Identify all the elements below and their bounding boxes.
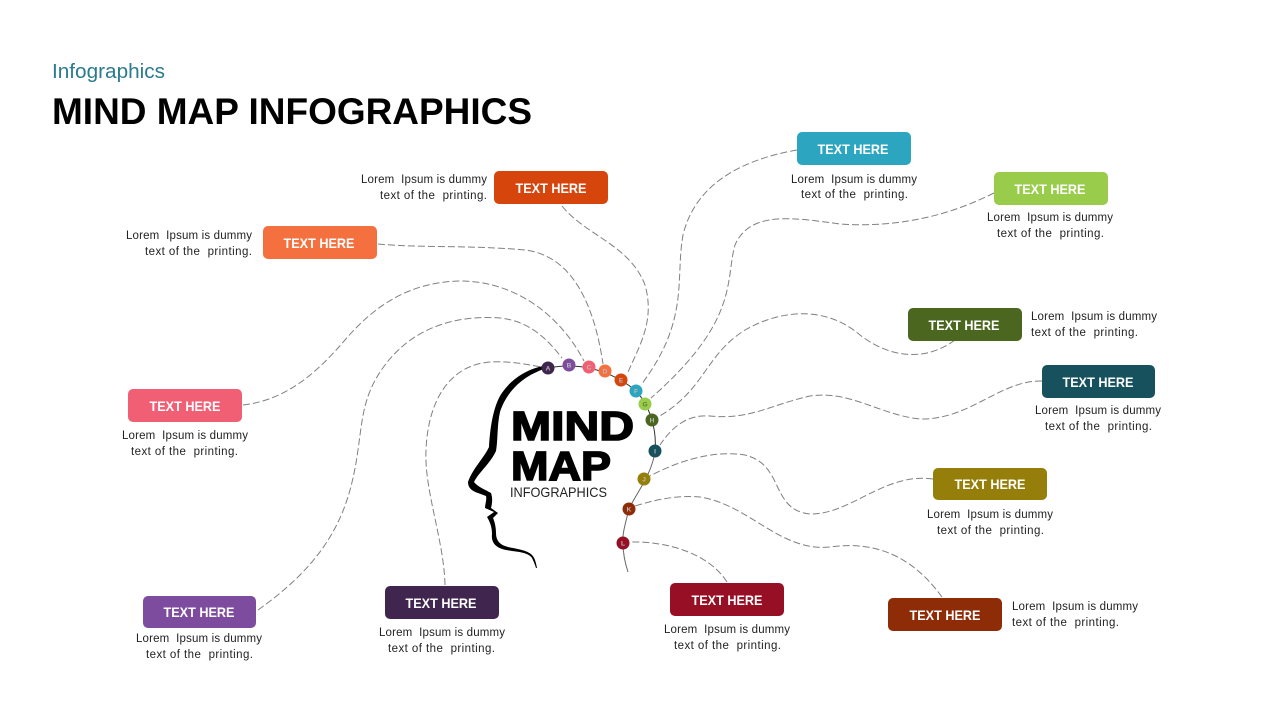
node spine bbox=[548, 366, 655, 572]
connector lines bbox=[243, 150, 1042, 610]
node D: orange box: TEXT HERE bbox=[284, 235, 354, 251]
node B: purple box: Lorem Ipsum is dummy bbox=[136, 633, 262, 645]
node badges: I bbox=[654, 448, 656, 456]
node B: purple box: text of the printing. bbox=[146, 649, 253, 661]
node F: teal box: TEXT HERE bbox=[818, 141, 888, 157]
node badges bbox=[542, 358, 662, 550]
node I: deep teal box: Lorem Ipsum is dummy bbox=[1035, 405, 1161, 417]
node H: dark green box: Lorem Ipsum is dummy bbox=[1031, 311, 1157, 323]
node E: red-orange box: Lorem Ipsum is dummy bbox=[361, 174, 487, 186]
node A: dark purple box: text of the printing. bbox=[388, 643, 495, 655]
node I: deep teal box bbox=[1035, 365, 1161, 433]
node A: dark purple box: Lorem Ipsum is dummy bbox=[379, 627, 505, 639]
node E: red-orange box bbox=[361, 171, 608, 204]
node E: red-orange box: TEXT HERE bbox=[516, 180, 586, 196]
node K: brown box bbox=[888, 598, 1138, 631]
subtitle: Infographics bbox=[52, 61, 165, 83]
node G: light green box: TEXT HERE bbox=[1014, 181, 1086, 197]
node B: purple box bbox=[136, 596, 262, 661]
node H: dark green box bbox=[908, 308, 1157, 341]
node J: olive box: Lorem Ipsum is dummy bbox=[927, 509, 1053, 521]
node L: crimson box: Lorem Ipsum is dummy bbox=[664, 624, 790, 636]
node J: olive box bbox=[927, 468, 1053, 537]
node badges: C bbox=[587, 364, 592, 372]
node F: teal box: text of the printing. bbox=[801, 189, 908, 201]
node F: teal box: Lorem Ipsum is dummy bbox=[791, 174, 917, 186]
node A: dark purple box: TEXT HERE bbox=[406, 595, 476, 611]
node D: orange box bbox=[126, 226, 377, 259]
centre label bbox=[510, 403, 634, 500]
node G: light green box: Lorem Ipsum is dummy bbox=[987, 212, 1113, 224]
node I: deep teal box: TEXT HERE bbox=[1062, 374, 1134, 390]
centre label: MAP bbox=[511, 443, 611, 489]
node badges: E bbox=[619, 378, 624, 384]
node C: pink box: TEXT HERE bbox=[150, 398, 220, 414]
node I: deep teal box: text of the printing. bbox=[1045, 421, 1152, 433]
node G: light green box bbox=[987, 172, 1113, 240]
node H: dark green box: text of the printing. bbox=[1031, 327, 1138, 339]
node badges: K bbox=[627, 506, 632, 514]
node badges: B bbox=[567, 362, 572, 370]
node A: dark purple box bbox=[379, 586, 505, 655]
node J: olive box: text of the printing. bbox=[937, 525, 1044, 537]
node badges: F bbox=[634, 388, 638, 396]
node D: orange box: Lorem Ipsum is dummy bbox=[126, 230, 252, 242]
node badges: J bbox=[642, 476, 646, 484]
node G: light green box: text of the printing. bbox=[997, 228, 1104, 240]
node badges: L bbox=[621, 540, 625, 548]
centre label: MIND bbox=[511, 403, 634, 449]
node C: pink box bbox=[122, 389, 248, 458]
node K: brown box: TEXT HERE bbox=[910, 607, 980, 623]
node F: teal box bbox=[791, 132, 917, 201]
head silhouette bbox=[468, 366, 544, 568]
node badges: A bbox=[546, 366, 551, 372]
title: MIND MAP INFOGRAPHICS bbox=[52, 91, 532, 132]
node C: pink box: Lorem Ipsum is dummy bbox=[122, 430, 248, 442]
node L: crimson box bbox=[664, 583, 790, 652]
node H: dark green box: TEXT HERE bbox=[928, 317, 1000, 333]
node badges: H bbox=[650, 418, 655, 424]
node K: brown box: text of the printing. bbox=[1012, 617, 1119, 629]
node L: crimson box: TEXT HERE bbox=[692, 592, 762, 608]
node B: purple box: TEXT HERE bbox=[164, 604, 234, 620]
node badges: G bbox=[642, 402, 648, 408]
node D: orange box: text of the printing. bbox=[145, 246, 252, 258]
node K: brown box: Lorem Ipsum is dummy bbox=[1012, 601, 1138, 613]
node J: olive box: TEXT HERE bbox=[954, 476, 1026, 492]
node L: crimson box: text of the printing. bbox=[674, 640, 781, 652]
node E: red-orange box: text of the printing. bbox=[380, 190, 487, 202]
node badges: D bbox=[603, 368, 608, 376]
node C: pink box: text of the printing. bbox=[131, 446, 238, 458]
centre label: INFOGRAPHICS bbox=[510, 484, 607, 500]
